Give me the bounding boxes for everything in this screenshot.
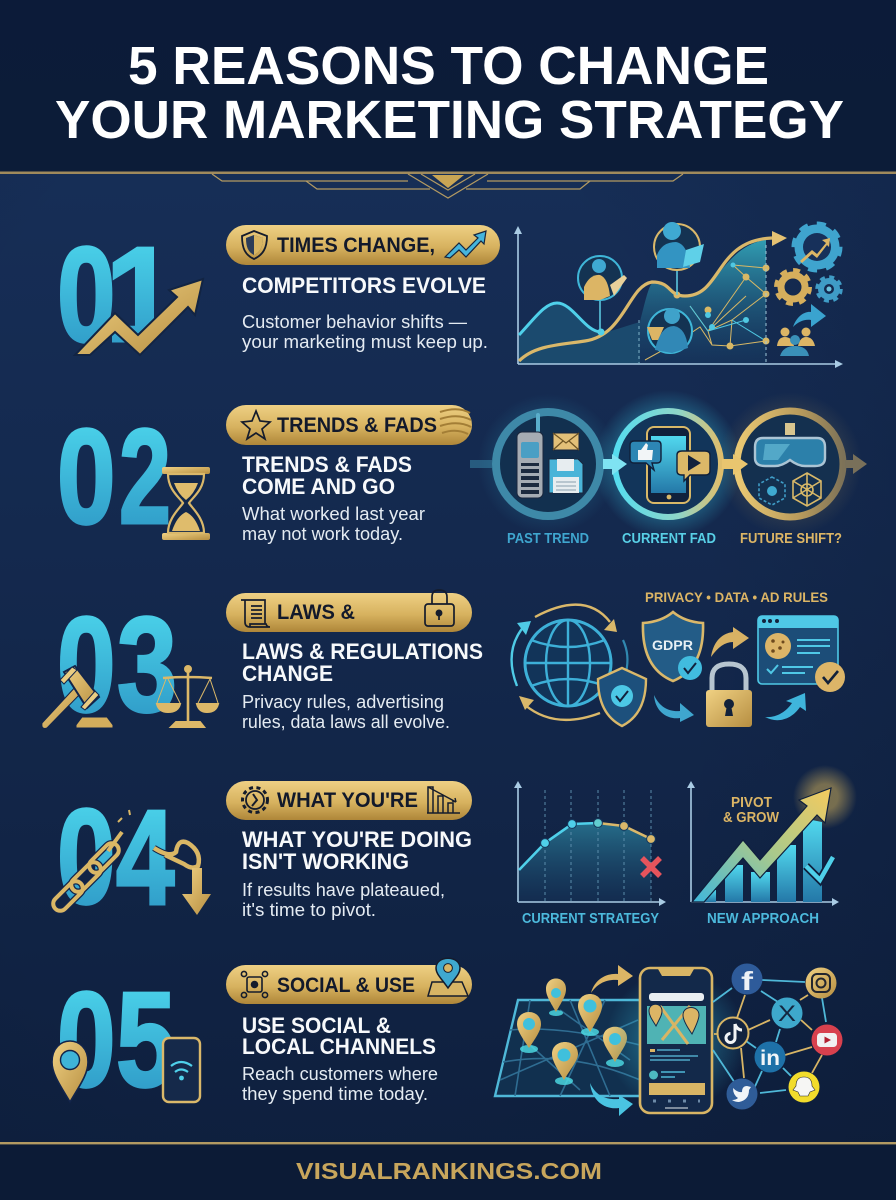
row 4 heading and text: it's time to pivot. (242, 900, 376, 920)
row 3 number (42, 589, 218, 740)
icon: cookie window (758, 616, 845, 692)
row 3 heading and text (242, 639, 483, 732)
row 2 heading and text: What worked last year (242, 504, 425, 524)
icon: youtube (812, 1024, 842, 1056)
icon: padlock (706, 664, 752, 727)
row 4 pill (226, 781, 472, 820)
row 5 heading and text: Reach customers where (242, 1064, 438, 1084)
icon: gold zigzag arrow (75, 279, 203, 355)
row 2 heading and text (242, 452, 425, 544)
icon: X (772, 998, 802, 1028)
arrow: cyan up to window (765, 693, 806, 720)
chart axes (518, 786, 662, 902)
row 2 number (57, 401, 210, 552)
row 4 heading and text (242, 827, 472, 920)
chart axes (518, 229, 836, 364)
chart: new approach (687, 765, 857, 927)
label: current strategy: CURRENT STRATEGY (522, 911, 659, 927)
ring: past trend (496, 412, 600, 516)
title (55, 36, 844, 150)
icon: gold polyhedron (793, 473, 821, 506)
icon: scroll (241, 600, 270, 627)
icon: blue curved arrow (793, 304, 826, 327)
person circle 3 (647, 308, 692, 353)
icon: nodes (241, 971, 268, 998)
row 4 number: 4 (116, 782, 174, 933)
row 1 heading and text: Customer behavior shifts — (242, 312, 467, 332)
chart axes (691, 786, 835, 902)
row 1 chart: customer behaviour curve (514, 222, 843, 368)
label: privacy data ad rules: PRIVACY • DATA • AD RULES (645, 589, 828, 605)
title: 5 REASONS TO CHANGE (128, 36, 769, 96)
arrows around globe (512, 605, 627, 720)
row 1 heading and text (242, 273, 488, 352)
icon: shield (242, 231, 267, 259)
label: future shift: FUTURE SHIFT? (740, 531, 842, 547)
icon: GDPR shield: GDPR (652, 638, 693, 653)
gold line (519, 238, 772, 361)
row 1 number: 0 (57, 219, 116, 370)
icon: check (806, 857, 833, 880)
icon: broken gear (242, 788, 268, 812)
icon: small blue gear (817, 277, 841, 301)
label: pivot and grow: PIVOT (731, 795, 772, 811)
icon: broken chain (50, 810, 199, 914)
icon: waves (440, 409, 471, 434)
icon: tiktok (718, 1018, 748, 1048)
row 2 heading and text: COME AND GO (242, 474, 395, 499)
arrow: pivot zigzag (692, 788, 831, 902)
header band (0, 0, 896, 174)
icon: blue trend arrow (445, 231, 486, 258)
icon: scales (157, 666, 218, 727)
icon: map with pin (428, 958, 468, 996)
arrow: gold (711, 627, 749, 657)
row 3 heading and text: rules, data laws all evolve. (242, 712, 450, 732)
icon: X: X (778, 1001, 796, 1026)
ring: current fad (615, 411, 721, 517)
icon: GDPR shield (643, 612, 703, 681)
icon: facebook (732, 964, 762, 996)
row 2 pill: TRENDS & FADS (277, 414, 437, 437)
arrow: cyan to phone (590, 1083, 633, 1116)
map (495, 1000, 640, 1096)
icon: linkedin (754, 1042, 786, 1072)
row 3 number: 0 (57, 589, 116, 740)
icon: VR headset (755, 423, 825, 466)
arrow: future fading (845, 454, 867, 474)
icon: phone with wifi (163, 1038, 200, 1102)
person circle 1 (578, 256, 627, 300)
row 1 pill (226, 225, 500, 265)
icon: instagram (806, 968, 836, 998)
chart: current strategy (514, 781, 666, 927)
icon: small shield (598, 668, 646, 726)
row 5 heading and text: LOCAL CHANNELS (242, 1034, 436, 1059)
icon: hexagon cube (759, 477, 785, 505)
label: pivot and grow: & GROW (723, 810, 779, 826)
row 3 heading and text: CHANGE (242, 661, 333, 686)
row 5 pill: SOCIAL & USE (277, 974, 415, 997)
icon: thumbs up bubble (630, 441, 661, 470)
icon: hourglass (162, 467, 210, 540)
phone glow (606, 970, 746, 1110)
label: past trend: PAST TREND (507, 531, 589, 547)
row 3 heading and text: LAWS & REGULATIONS (242, 639, 483, 664)
row 1 heading and text: your marketing must keep up. (242, 332, 488, 352)
icon: snapchat (788, 1072, 820, 1102)
footer text: VISUALRANKINGS.COM (296, 1158, 602, 1184)
row 5 heading and text: USE SOCIAL & (242, 1013, 391, 1038)
row 5 illustration (495, 964, 842, 1116)
row 2 heading and text: TRENDS & FADS (242, 452, 412, 477)
icon: old phone (517, 413, 543, 498)
header ornament (212, 174, 683, 198)
arrow: past to current (603, 454, 627, 475)
icon: floppy disk (549, 459, 583, 493)
bars (705, 820, 822, 902)
row 2 pill (226, 405, 472, 445)
icon: twitter bird (726, 1078, 758, 1110)
icon: declining bars (427, 787, 460, 813)
row 4 number (50, 781, 211, 933)
row 3 heading and text: Privacy rules, advertising (242, 692, 444, 712)
row 2 timeline (470, 390, 867, 547)
row 2 heading and text: may not work today. (242, 524, 403, 544)
icon: location pin (52, 1041, 88, 1102)
icon: red x (642, 858, 660, 876)
row 4 pill: WHAT YOU'RE (277, 789, 418, 812)
arrow: gold to phone (591, 965, 633, 993)
icon: star (242, 411, 270, 439)
icon: smartphone (647, 427, 690, 503)
row 1 pill: TIMES CHANGE, (277, 234, 435, 257)
icon: linkedin: in (760, 1047, 780, 1070)
icon: padlock (425, 590, 454, 626)
row 3 pill: LAWS & (277, 601, 355, 624)
row 5 number: 5 (116, 964, 176, 1115)
row 4 heading and text: ISN'T WORKING (242, 849, 409, 874)
row 5 number (52, 964, 200, 1115)
arrow: cyan to lock (654, 695, 694, 722)
row 1 number (60, 245, 204, 356)
row 3 illustration: privacy (512, 589, 845, 727)
icon: envelope (553, 433, 579, 450)
icon: globe (525, 620, 611, 706)
row 1 number: 1 (105, 219, 180, 370)
icon: people group (777, 328, 815, 356)
row 5 heading and text (242, 1013, 438, 1104)
icon: gold gear (776, 270, 810, 304)
row 4 heading and text: WHAT YOU'RE DOING (242, 827, 472, 852)
icon: down arrow (182, 868, 211, 915)
cyan line (519, 303, 601, 335)
icon: facebook: f (741, 966, 753, 996)
row 2 number: 2 (119, 401, 171, 552)
arrow: incoming (470, 460, 492, 468)
row 3 number: 3 (117, 589, 177, 740)
arrow: current to future (722, 454, 748, 475)
network (645, 265, 766, 360)
ring: future shift (737, 411, 843, 517)
phone (640, 968, 712, 1113)
social connections (713, 980, 826, 1093)
row 3 pill (226, 590, 472, 632)
row 4 number: 0 (57, 781, 116, 932)
icon: play bubble (677, 451, 710, 481)
label: current fad: CURRENT FAD (622, 531, 716, 547)
icon: gavel (42, 666, 113, 728)
row 5 pill (226, 958, 472, 1004)
row 2 number: 0 (57, 401, 116, 552)
footer band (0, 1142, 896, 1200)
title: YOUR MARKETING STRATEGY (55, 90, 844, 150)
label: pivot and grow (723, 795, 779, 826)
label: new approach: NEW APPROACH (707, 911, 819, 927)
row 5 heading and text: they spend time today. (242, 1084, 428, 1104)
trend line (519, 823, 598, 870)
row 4 heading and text: If results have plateaued, (242, 880, 445, 900)
row 1 heading and text: COMPETITORS EVOLVE (242, 273, 486, 298)
icon: blue gear with arrow (794, 224, 840, 270)
person circle 2 (654, 222, 704, 270)
pins (517, 978, 627, 1085)
row 5 number: 0 (57, 964, 116, 1115)
